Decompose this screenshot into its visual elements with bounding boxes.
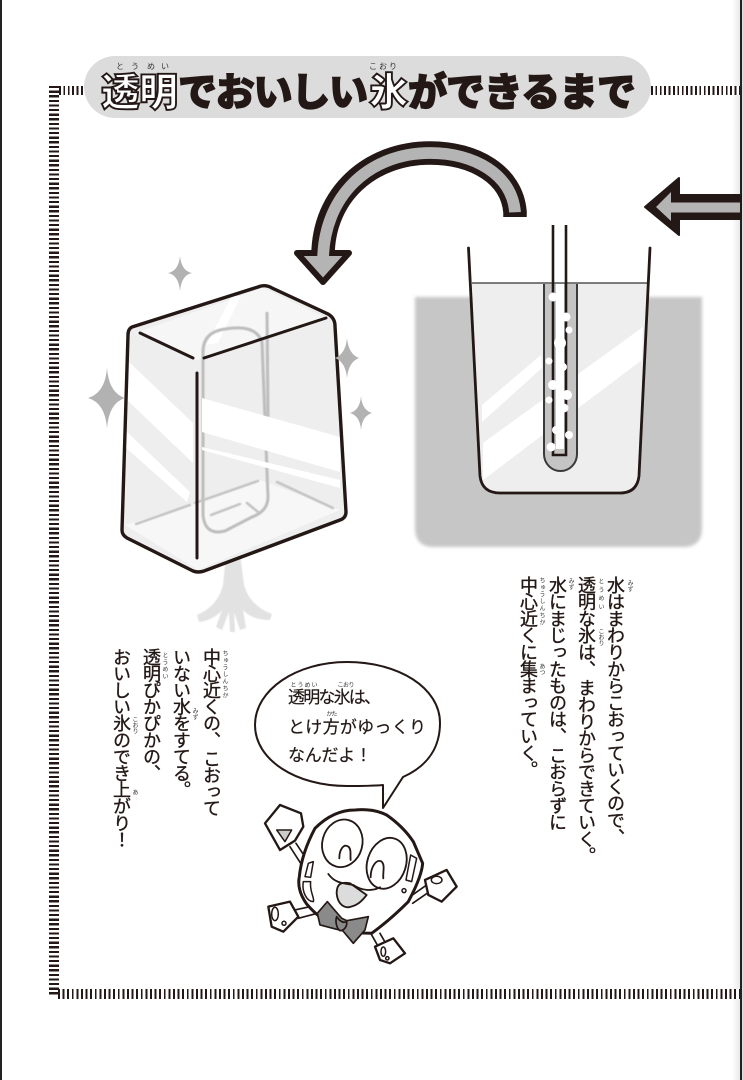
speech bubble: こおり	[338, 682, 354, 689]
straight arrow	[645, 178, 741, 235]
furigana: みず	[191, 708, 197, 720]
mascot: ice cube character	[265, 805, 457, 963]
speech bubble: とうめい	[290, 682, 318, 689]
sparkles	[88, 256, 372, 430]
furigana: とうめい	[161, 652, 167, 680]
furigana: あつ	[538, 663, 544, 675]
title banner: 明	[139, 72, 178, 115]
title banner: ができるまで	[408, 71, 636, 115]
title banner: こ	[369, 62, 377, 71]
furigana: こおり	[131, 716, 137, 734]
left text column 4: おいしい氷のでき上がり！	[111, 648, 131, 847]
title banner: い	[161, 62, 169, 71]
furigana: ちゅうしんちか	[538, 577, 544, 626]
furigana: みず	[626, 580, 632, 592]
title banner: り	[389, 62, 397, 71]
arms and legs	[290, 843, 428, 945]
right text column 3: 水にまじったものは、 こおらずに	[547, 576, 567, 830]
cheek marks	[303, 855, 417, 902]
right text column 2: 透明な氷は、 まわりからできていく。	[576, 576, 596, 864]
transparent ice block	[122, 286, 346, 572]
left text column 3: 透明ぴかぴかの、	[141, 648, 161, 781]
right text column 1: 水はまわりからこおっていくので、	[605, 576, 625, 845]
title banner: 氷	[369, 72, 408, 115]
speech bubble: なんだよ！	[288, 746, 372, 765]
curved arrow	[297, 153, 515, 282]
title banner	[84, 56, 651, 118]
furigana: ちゅうしんちか	[221, 650, 227, 699]
left text column 1: 中心近くの、 こおって	[201, 648, 221, 816]
title banner: お	[379, 62, 387, 71]
hands and feet	[265, 805, 457, 963]
tube with impurities	[544, 225, 577, 471]
title banner: でおいしい	[178, 72, 368, 115]
speech bubble: かた	[326, 711, 338, 718]
gray backing panel	[415, 297, 702, 547]
right text column 4: 中心近くに集まっていく。	[518, 576, 538, 778]
bow tie	[317, 902, 368, 943]
eyes	[317, 815, 413, 894]
title banner: う	[131, 62, 139, 71]
left text column 2: いない水をすてる。	[171, 648, 191, 797]
speech bubble: 透明な氷は、	[288, 688, 381, 707]
body	[299, 810, 423, 933]
mouth	[328, 874, 380, 907]
title banner: と	[116, 62, 124, 71]
cup of water	[468, 225, 650, 494]
ice melt drip shape	[197, 539, 272, 632]
furigana: こおり	[597, 628, 603, 646]
title banner: め	[147, 62, 155, 71]
title banner: 透	[101, 72, 140, 115]
furigana: あ	[131, 789, 137, 795]
speech bubble: とけ方がゆっくり	[288, 718, 426, 737]
furigana: みず	[567, 578, 573, 590]
speech bubble	[255, 662, 440, 808]
furigana: とうめい	[597, 578, 603, 612]
